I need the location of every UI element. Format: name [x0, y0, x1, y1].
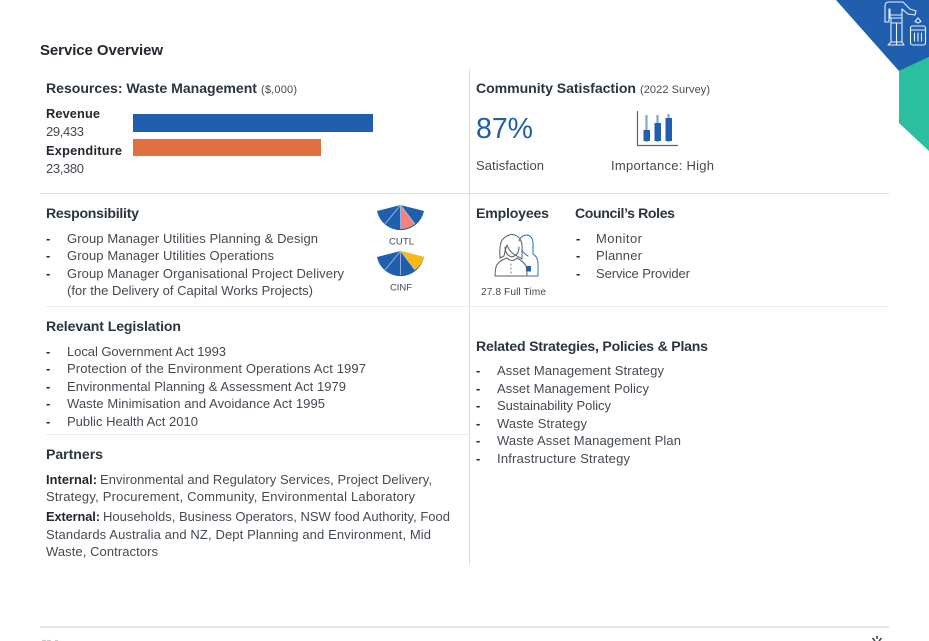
legislation list: -: [46, 361, 50, 376]
heading: employees: Employees: [476, 205, 549, 221]
strategies list: Asset Management Policy: [497, 381, 650, 396]
icon: importance bars: [638, 111, 678, 146]
internal partners: Environmental and Regulatory Services, Project Delivery,: [100, 472, 432, 487]
strategies list: -: [476, 381, 480, 396]
legislation list: -: [46, 396, 50, 411]
expenditure value: 23,380: [46, 161, 84, 176]
strategies list: -: [476, 416, 480, 431]
revenue bar: [133, 114, 373, 132]
responsibility list: -: [46, 248, 50, 263]
strategies list: [476, 363, 681, 466]
responsibility list: Group Manager Organisational Project Delivery: [67, 266, 344, 281]
panel: council roles: [575, 205, 691, 281]
legislation list: Local Government Act 1993: [67, 344, 226, 359]
icon: person dropping waste in bin: [885, 2, 926, 45]
strategies list: -: [476, 363, 480, 378]
corner decoration: [836, 0, 929, 151]
roles list: -: [576, 266, 580, 281]
legislation list: -: [46, 344, 50, 359]
external partners: Households, Business Operators, NSW food Authority, Food: [103, 509, 450, 524]
heading: community satisfaction: Community Satisfaction: [476, 80, 636, 96]
icon: CUTL fan: [377, 205, 424, 230]
strategies list: Waste Asset Management Plan: [497, 433, 681, 448]
internal partners: Strategy, Procurement, Community, Environmental Laboratory: [46, 489, 416, 504]
footer: [40, 627, 889, 641]
label: CINF: CINF: [390, 282, 412, 294]
expenditure label: Expenditure: [46, 143, 122, 158]
internal partners: Internal:: [46, 472, 97, 487]
strategies list: -: [476, 433, 480, 448]
legislation list: Protection of the Environment Operations Act 1997: [67, 361, 366, 376]
external partners: Standards Australia and NZ, Dept Planning and Environment, Mid: [46, 527, 431, 542]
strategies list: Infrastructure Strategy: [497, 451, 630, 466]
legislation list: Public Health Act 2010: [67, 414, 198, 429]
icon: CINF fan: [377, 251, 424, 276]
roles list: Planner: [596, 248, 643, 263]
responsibility list: Group Manager Utilities Operations: [67, 248, 274, 263]
responsibility list: (for the Delivery of Capital Works Projects): [67, 283, 313, 298]
importance label: Importance: High: [611, 158, 714, 173]
legislation list: Environmental Planning & Assessment Act 1979: [67, 379, 346, 394]
panel: community satisfaction: [476, 80, 714, 173]
external partners: External:: [46, 509, 100, 524]
heading: related strategies: Related Strategies, Policies & Plans: [476, 338, 708, 354]
external partners: Waste, Contractors: [46, 544, 158, 559]
strategies list: -: [476, 398, 480, 413]
expenditure bar: [133, 139, 321, 156]
satisfaction value: 87%: [476, 113, 533, 145]
FTE label: 27.8 Full Time: [481, 287, 546, 298]
survey note: (2022 Survey): [640, 84, 710, 96]
panel: partners: [46, 446, 450, 559]
roles list: -: [576, 248, 580, 263]
panel: related strategies: [476, 338, 708, 466]
heading: council roles: Council’s Roles: [575, 205, 675, 221]
strategies list: -: [476, 451, 480, 466]
responsibility list: Group Manager Utilities Planning & Design: [67, 231, 318, 246]
panel: resources: [46, 80, 373, 176]
responsibility list: [46, 231, 344, 298]
legislation list: -: [46, 379, 50, 394]
panel: legislation: [46, 318, 366, 429]
revenue value: 29,433: [46, 124, 84, 139]
satisfaction label: Satisfaction: [476, 158, 544, 173]
internal partners: [46, 472, 432, 504]
roles list: Monitor: [596, 231, 643, 246]
heading: partners: Partners: [46, 446, 103, 462]
title: Service Overview: [40, 42, 163, 59]
legislation list: -: [46, 414, 50, 429]
heading: resources: Resources: Waste Management: [46, 80, 257, 96]
roles list: Service Provider: [596, 266, 691, 281]
responsibility list: -: [46, 266, 50, 281]
legislation list: Waste Minimisation and Avoidance Act 1995: [67, 396, 325, 411]
strategies list: Asset Management Strategy: [497, 363, 664, 378]
roles list: [576, 231, 691, 281]
roles list: -: [576, 231, 580, 246]
label: CUTL: CUTL: [389, 236, 414, 248]
panel: employees: [476, 205, 549, 298]
external partners: [46, 509, 450, 559]
legislation list: [46, 344, 366, 429]
strategies list: Sustainability Policy: [497, 398, 612, 413]
icon: two staff: [495, 235, 538, 276]
unit note: ($,000): [261, 84, 297, 96]
footer mark: [872, 636, 882, 641]
heading: responsibility: Responsibility: [46, 205, 139, 221]
strategies list: Waste Strategy: [497, 416, 588, 431]
revenue label: Revenue: [46, 106, 100, 121]
heading: legislation: Relevant Legislation: [46, 318, 181, 334]
responsibility list: -: [46, 231, 50, 246]
panel: responsibility: [46, 205, 424, 298]
